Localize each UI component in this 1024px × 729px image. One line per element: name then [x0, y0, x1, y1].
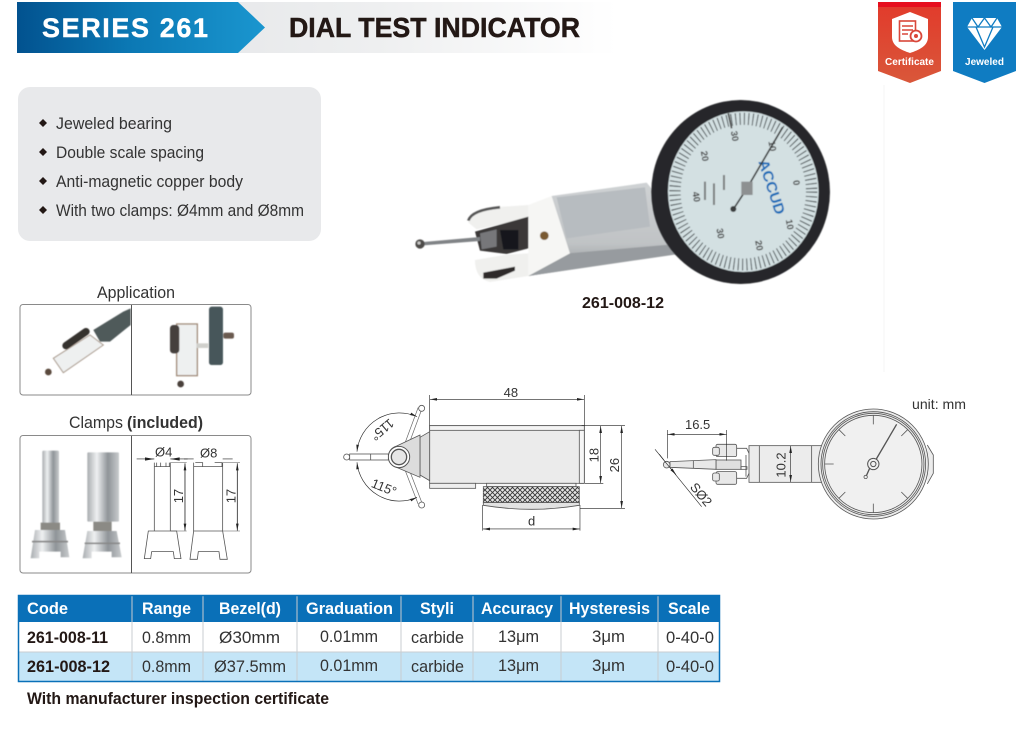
dimension lines [430, 395, 625, 531]
panel: features [18, 87, 321, 241]
knurled bezel [483, 487, 579, 503]
clamps heading: (included) [127, 413, 203, 432]
table row 261-008-11: 3μm [592, 627, 625, 646]
drawing: front view: 16.5 [685, 417, 710, 432]
table row 261-008-11: 0.01mm [320, 627, 378, 646]
table row 261-008-12: 0.01mm [320, 656, 378, 675]
dial numerals: 20 [753, 239, 765, 251]
product photo: dial test indicator [415, 100, 830, 284]
dial numerals: 40 [690, 191, 702, 203]
upper fork arm [468, 205, 528, 229]
dial rings [818, 409, 928, 519]
drawing: front view [655, 409, 933, 519]
knob [927, 445, 933, 484]
table header row: Hysteresis [569, 599, 650, 618]
table header row: Accuracy [481, 599, 554, 618]
drawing: front view: SØ2 [687, 480, 715, 509]
icon: diamond [967, 18, 1002, 50]
table row 261-008-12: 0-40-0 [666, 657, 714, 676]
table row 261-008-11: carbide [411, 628, 464, 647]
table row 261-008-11: 0.8mm [142, 628, 191, 647]
drawing: clamp dimensions: Ø8 [200, 445, 217, 460]
photo: clamp 4mm [31, 451, 69, 558]
scale ticks [675, 119, 812, 264]
dial numerals: 10 [766, 140, 778, 152]
needle [733, 127, 783, 209]
drawing: side view: d [528, 513, 535, 528]
clamps heading [69, 413, 203, 432]
dial ticks [825, 415, 908, 513]
body [528, 183, 700, 276]
clamp block [528, 196, 570, 276]
feature 2: Double scale spacing [56, 144, 204, 162]
table row 261-008-12: Ø37.5mm [214, 657, 286, 676]
table row 261-008-11: 261-008-11 [27, 628, 108, 647]
table header row: Bezel(d) [219, 599, 281, 618]
table header row: Code [27, 599, 68, 618]
needle [866, 424, 897, 477]
feature 1: Jeweled bearing [56, 115, 172, 133]
lower fork arm [475, 253, 528, 282]
application heading: Application [97, 284, 175, 302]
badge: jeweled [953, 2, 1016, 83]
drawing: clamp dimensions: Ø4 [155, 445, 172, 460]
table row 261-008-12 [18, 652, 720, 681]
specification table [18, 595, 720, 682]
drawing: clamp dimensions: 17 [171, 489, 186, 503]
table row 261-008-11: Ø30mm [219, 628, 280, 647]
drawing: side view: 48 [504, 385, 518, 400]
panel: application photos [20, 304, 251, 395]
table row 261-008-11: 0-40-0 [666, 628, 714, 647]
photo: application right [170, 307, 234, 387]
brand: ACCUD [754, 158, 787, 217]
badge: certificate [878, 2, 941, 83]
unit note: unit: mm [912, 396, 966, 412]
table row 261-008-11 [18, 622, 720, 652]
panel: clamps [20, 436, 251, 573]
badge label: Jeweled [965, 57, 1004, 68]
stylus arms [403, 408, 420, 503]
stylus [350, 454, 388, 460]
photo: application left [45, 308, 131, 375]
badge label: Certificate [885, 57, 934, 68]
stylus [423, 237, 480, 245]
title: DIAL TEST INDICATOR [289, 12, 580, 43]
dial numerals: 20 [699, 150, 710, 162]
small dial text [705, 175, 724, 205]
fork [737, 448, 749, 478]
dial numerals: 10 [784, 218, 795, 230]
dimensions [655, 430, 791, 507]
angle arcs [357, 413, 417, 452]
table row 261-008-12: 3μm [592, 656, 625, 675]
table row 261-008-12: 261-008-12 [27, 657, 110, 676]
drawing: front view: 10.2 [773, 452, 788, 478]
drawing: side view [344, 385, 625, 531]
table header row: Range [142, 599, 191, 618]
header banner [17, 2, 617, 53]
table header row: Scale [668, 599, 710, 618]
drawing: side view: 18 [586, 448, 601, 462]
series heading: SERIES 261 [42, 13, 208, 43]
table row 261-008-11: 13μm [498, 627, 539, 646]
model label: 261-008-12 [582, 295, 664, 312]
photo: clamp 8mm [83, 452, 122, 558]
drawing: side view: 115° [368, 416, 397, 444]
table row 261-008-12: carbide [411, 657, 464, 676]
dial numerals [690, 130, 802, 251]
drawing: side view: 115° [369, 476, 399, 499]
feature 3: Anti-magnetic copper body [56, 173, 244, 191]
drawing: side view: 26 [607, 458, 622, 472]
footnote: With manufacturer inspection certificate [27, 690, 329, 708]
dial numerals: 30 [714, 227, 726, 239]
stylus [670, 460, 716, 469]
table row 261-008-12: 0.8mm [142, 657, 191, 676]
dial [651, 100, 830, 284]
fork interior [475, 217, 528, 254]
clamps heading: Clamps [69, 413, 123, 432]
dial numerals: 0 [791, 179, 802, 186]
drawing: clamp dimensions: 17 [223, 489, 238, 503]
table header row: Styli [420, 599, 454, 618]
table header row [18, 595, 720, 622]
table header row: Graduation [306, 599, 393, 618]
unit body [749, 446, 824, 482]
dial numerals: 30 [729, 130, 740, 142]
faint vertical rule [883, 85, 885, 372]
table row 261-008-12: 13μm [498, 656, 539, 675]
feature 4: With two clamps: Ø4mm and Ø8mm [56, 202, 304, 220]
icon: certificate shield [892, 12, 928, 53]
drawing: clamp dimensions [137, 445, 240, 559]
